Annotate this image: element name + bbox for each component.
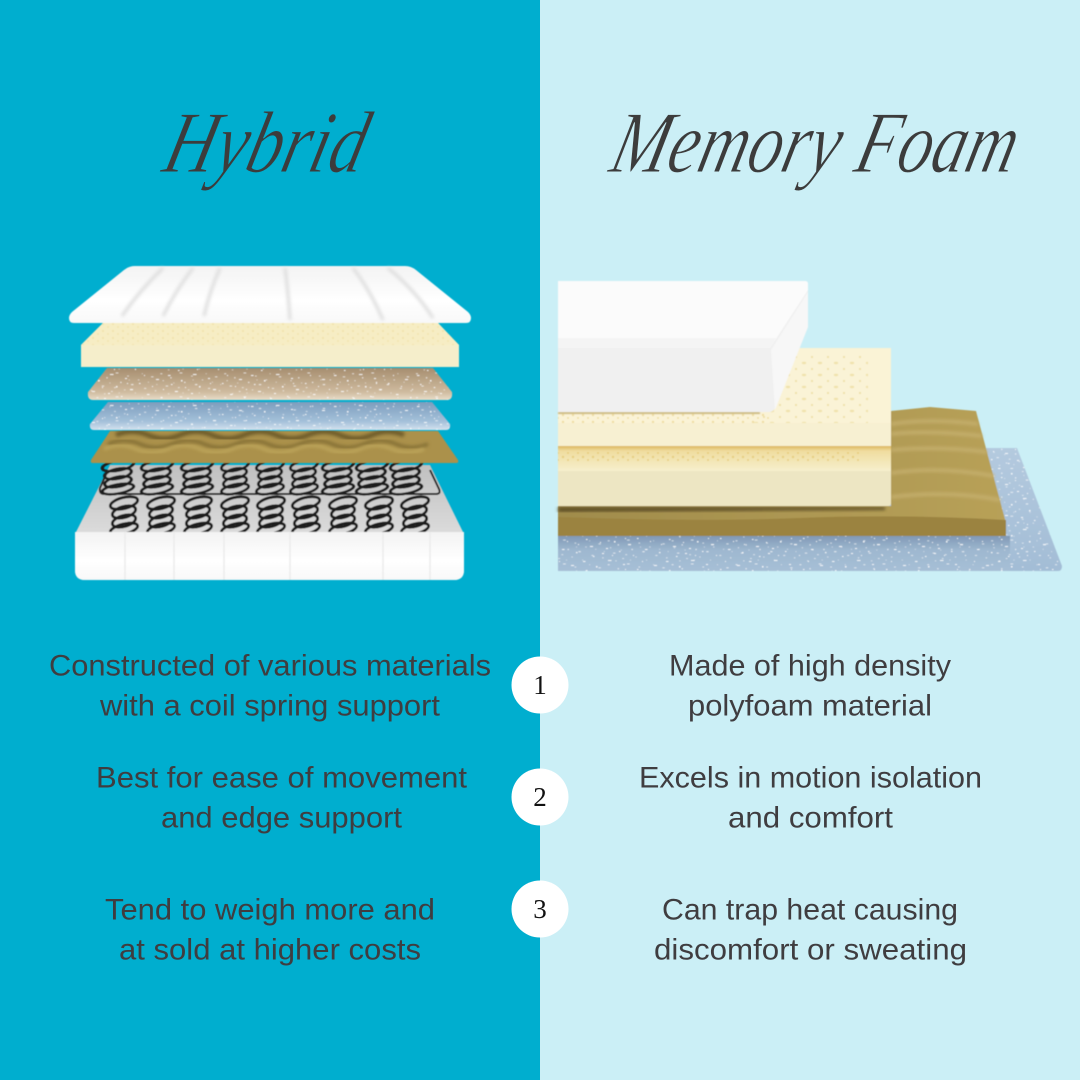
base with coil box (75, 458, 464, 580)
text: row 3 hybrid: at sold at higher costs (119, 934, 421, 966)
blue speckled layer (90, 402, 450, 430)
text: row 2 hybrid (96, 762, 467, 834)
text: row 2 memory foam: Excels in motion isolation (639, 762, 982, 794)
coil springs (100, 458, 440, 537)
gold wavy layer (558, 407, 1006, 536)
panel: memory foam background (540, 0, 1080, 1080)
text: row 1 memory foam: Made of high density (669, 650, 951, 682)
cream lower foam layer (558, 446, 891, 506)
illustration: hybrid mattress exploded layers (69, 266, 471, 580)
text: row 2 memory foam: and comfort (728, 802, 893, 834)
number badge 3: 3 (533, 894, 547, 924)
illustration: memory foam stacked layers (558, 281, 1062, 571)
text: row 2 hybrid: Best for ease of movement (96, 762, 467, 794)
text: row 3 memory foam: discomfort or sweating (654, 934, 967, 966)
tan speckled layer (88, 368, 452, 400)
number badge 1: 1 (533, 670, 547, 700)
cream upper foam layer (558, 348, 891, 446)
number badge 3 (512, 880, 568, 938)
blue speckled base layer (558, 448, 1062, 571)
number badge 1 (512, 656, 568, 714)
panel: hybrid background (0, 0, 540, 1080)
text: row 3 memory foam: Can trap heat causing (662, 894, 958, 926)
number badge 2: 2 (533, 782, 547, 812)
white quilted top layer (558, 281, 808, 412)
text: row 1 hybrid (49, 650, 491, 722)
text: row 1 memory foam: polyfoam material (688, 690, 932, 722)
title: Hybrid: Hybrid (154, 94, 380, 192)
text: row 1 hybrid: with a coil spring support (99, 690, 440, 722)
text: row 3 hybrid: Tend to weigh more and (105, 894, 435, 926)
gold egg-crate layer (91, 431, 458, 463)
number badge 2 (512, 768, 568, 826)
cream foam layer (81, 323, 459, 367)
text: row 3 memory foam (654, 894, 967, 966)
text: row 2 hybrid: and edge support (161, 802, 402, 834)
text: row 1 memory foam (669, 650, 951, 722)
text: row 1 hybrid: Constructed of various materials (49, 650, 491, 682)
text: row 3 hybrid (105, 894, 435, 966)
text: row 2 memory foam (639, 762, 982, 834)
white pillow top (69, 266, 471, 323)
